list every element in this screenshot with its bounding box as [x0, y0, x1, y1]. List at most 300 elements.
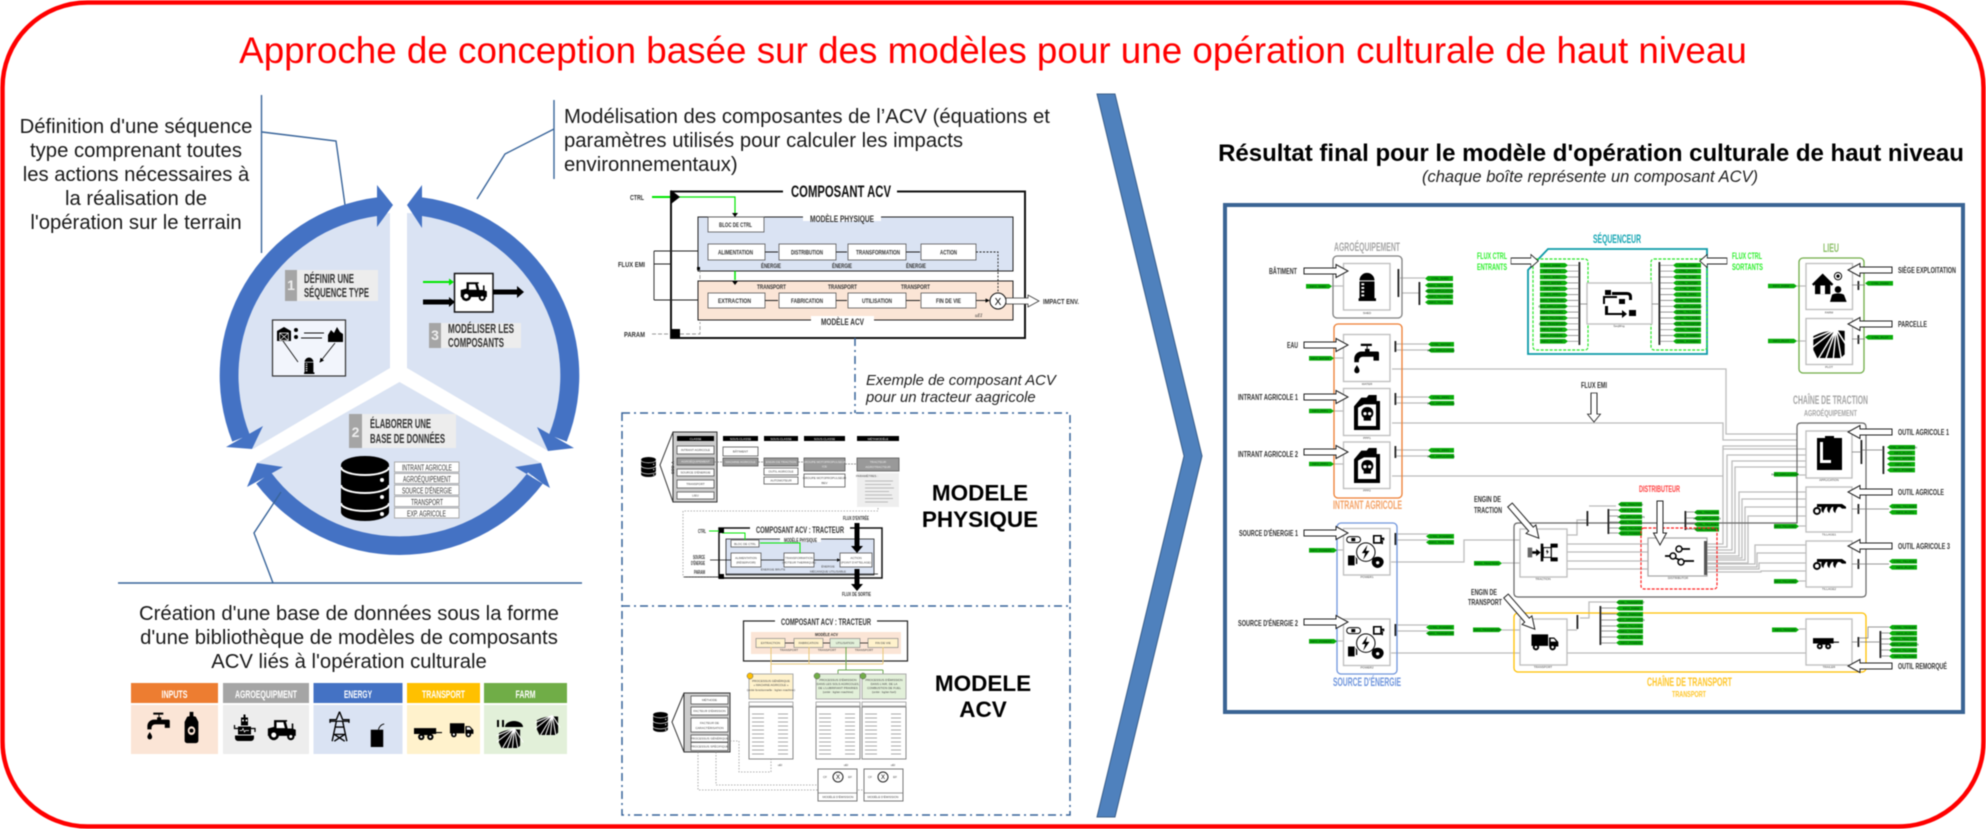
- tags: traction chain: INFO_TILLAGE2: [1620, 526, 1642, 530]
- group: sequencer: [1477, 233, 1763, 354]
- diagram: tractor physical model: COMPOSANT ACV : TRACTEUR: [756, 525, 844, 535]
- emission models: EF: [848, 775, 852, 779]
- subtitle: final result: (chaque boîte représente un composant ACV): [1422, 168, 1758, 186]
- process columns: DANS LES SOLS AGRICOLES,: [817, 682, 860, 686]
- diagram: physical model class tree: OUTIL AGRICOLE: [769, 470, 793, 474]
- database categories: EXP. AGRICOLE: [407, 508, 446, 518]
- group: agricultural input: CTRL_PPP1: [1433, 395, 1450, 399]
- step 3 label: MODÉLISER LES: [448, 321, 514, 336]
- tags: traction chain: INFO_PLOT1: [1622, 508, 1640, 512]
- group: agroequipment: [1269, 239, 1454, 318]
- group: energy source: CTRL_POWER2: [1430, 625, 1452, 629]
- physical model block: MODÈLE PHYSIQUE: [810, 214, 874, 224]
- chevron arrow: [1097, 94, 1202, 817]
- diagram: LCA model for tractor: FIN DE VIE: [875, 641, 891, 645]
- tags: traction chain: CTRL_TILLAGE1: [1894, 504, 1917, 508]
- group: agricultural input: WATER: [1362, 382, 1373, 386]
- diagram: physical model class tree: SOUS-CLASSE: [770, 437, 792, 441]
- diagram: LCA component: [618, 182, 1079, 339]
- group: sequencer: INFO_TRACTION: [1540, 298, 1564, 302]
- tags: traction chain: CTRL_TILLAGE2: [1894, 559, 1917, 563]
- database categories: AGROÉQUIPEMENT: [403, 474, 451, 484]
- LCA database and classes: PROCESSUS GÉNÉRIQUE: [691, 736, 728, 740]
- machine components: TILLAGE2: [1822, 587, 1836, 591]
- category: agroequipment: [223, 683, 309, 754]
- database categories: [394, 462, 459, 518]
- arrow: left arc: [220, 185, 393, 449]
- physical model block: TRANSFORMATION: [856, 250, 900, 256]
- diagram: tractor physical model: ACTION: [850, 556, 862, 560]
- category: transport: TRANSPORT: [422, 689, 465, 701]
- text: database creation: d'une bibliothèque de modèles de composants: [140, 627, 558, 649]
- distributor: [1639, 484, 1717, 589]
- diagram: LCA component: PARAM: [624, 332, 645, 339]
- machine components: TILLAGE1: [1822, 532, 1836, 536]
- diagram: physical model class tree: SOUS-CLASSE: [730, 437, 751, 441]
- diagram: physical model class tree: ICE: [822, 464, 827, 468]
- group: transport chain: TRAILER: [1823, 665, 1836, 669]
- flux emi label: [1581, 380, 1607, 422]
- LCA model block: FABRICATION: [791, 299, 823, 305]
- group: sequencer: CTRL_TRACTION: [1676, 298, 1700, 302]
- tags: traction chain: [1474, 440, 1917, 584]
- diagram: physical model class tree: [641, 432, 899, 577]
- physical model block: DISTRIBUTION: [791, 250, 823, 256]
- group: sequencer: CTRL_PPP2: [1680, 293, 1697, 297]
- heading: modele acv: MODELE: [935, 671, 1031, 696]
- category: farm: [484, 683, 567, 754]
- grey signal lines: [1332, 278, 1806, 653]
- step 1 label: [285, 270, 378, 301]
- group: transport chain: INFO_TILLAGE1: [1620, 624, 1642, 628]
- group: sequencer: CTRL_TRAILER: [1677, 328, 1699, 332]
- diagram: physical model class tree: BDD-A: [670, 461, 675, 474]
- group: transport chain: TRANSPORT: [1468, 597, 1503, 607]
- group: agricultural input: [1238, 324, 1455, 512]
- group: energy source: CTRL_POWER1: [1430, 534, 1452, 538]
- diagram: LCA component: IMPACT ENV.: [1043, 299, 1079, 306]
- category: farm: FARM: [516, 689, 536, 701]
- group: transport chain: INFO_PLOT1: [1896, 631, 1914, 635]
- group: transport chain: INFO_PARKING: [1620, 612, 1642, 616]
- heading: modele physique: PHYSIQUE: [922, 507, 1038, 532]
- diagram: LCA component: FLUX EMI: [618, 262, 645, 269]
- LCA database and classes: FACTEUR DE: [700, 721, 719, 725]
- group: agricultural input: PPP2: [1363, 488, 1371, 492]
- group: sequencer: INFO_PPP2: [1544, 293, 1560, 297]
- category: agroequipment: AGROEQUIPMENT: [235, 689, 297, 701]
- LCA model block: TRANSPORT: [901, 285, 930, 291]
- group: sequencer: CTRL_SHED: [1679, 275, 1697, 279]
- tags: traction chain: CTRL_TILLAGE2: [1696, 527, 1719, 531]
- tags: traction chain: INFO_WATER: [1894, 457, 1912, 461]
- diagram: LCA model for tractor: TRANSPORT: [855, 648, 873, 652]
- callout: sequence definition: [20, 95, 345, 253]
- group: sequencer: CTRL_TILLAGE2: [1677, 316, 1700, 320]
- LCA model block: uEI: [975, 314, 983, 319]
- group: agroequipment: AGROÉQUIPEMENT: [1334, 239, 1400, 254]
- flux emi label: FLUX EMI: [1581, 380, 1607, 390]
- group: sequencer: INFO_TRAILER: [1542, 328, 1562, 332]
- diagram: tractor physical model: SOURCE: [693, 555, 705, 561]
- LCA database and classes: [653, 693, 880, 790]
- LCA model block: EXTRACTION: [718, 299, 751, 305]
- diagram: physical model class tree: INTRANT AGRICOLE: [681, 448, 710, 452]
- group: sequencer: CTRL_PPP1: [1680, 287, 1697, 291]
- group: agroequipment: INFO_TRACTION: [1428, 283, 1452, 287]
- callout: LCA component modelling: [477, 100, 1050, 199]
- group: location: CTRL_FARM: [1871, 281, 1889, 285]
- group: sequencer: INFO_PLOT1: [1543, 269, 1561, 273]
- group: energy source: INFO_POWER2: [1310, 640, 1332, 644]
- database categories: INTRANT AGRICOLE: [402, 462, 452, 472]
- arrow: bottom arc: [247, 463, 550, 555]
- category: transport: [407, 683, 480, 754]
- group: transport chain: INFO_FARM: [1623, 606, 1640, 610]
- labels: tools: ENGIN DE: [1474, 494, 1501, 504]
- group: location: FARM: [1825, 310, 1834, 314]
- diagram: physical model class tree: BEV: [821, 481, 828, 485]
- group: agroequipment: INFO_APPLICATION: [1426, 289, 1454, 293]
- diagram: tractor physical model: ALIMENTATION: [735, 556, 757, 560]
- group: energy source: SOURCE D'ÉNERGIE 1: [1239, 528, 1298, 538]
- tags: traction chain: INFO_TILLAGE1: [1620, 520, 1642, 524]
- LCA model block: [698, 281, 1013, 327]
- tags: traction chain: INFO_POWER: [1893, 468, 1913, 472]
- text: sequence definition: l'opération sur le terrain: [30, 212, 242, 234]
- group: agricultural input: INFO_PPP2: [1312, 462, 1328, 466]
- group: transport chain: OUTIL REMORQUÉ: [1898, 661, 1947, 671]
- emission models: X: [881, 775, 885, 781]
- group: location: INFO_FARM: [1773, 284, 1790, 288]
- text: sequence definition: les actions nécessaires à: [23, 164, 250, 186]
- group: transport chain: INFO_TRAILER: [1621, 635, 1641, 639]
- diagram: tractor physical model: TRANSFORMATION: [785, 556, 813, 560]
- database categories: TRANSPORT: [411, 497, 443, 507]
- group: traction chain: [1474, 380, 1950, 597]
- group: agroequipment: CTRL_SHED: [1431, 276, 1449, 280]
- group: transport chain: CTRL_TRAILER: [1894, 625, 1916, 629]
- text: sequence definition: Définition d'une séquence: [20, 116, 252, 138]
- tags: traction chain: INFO_PLOT1: [1896, 510, 1914, 514]
- emission models: MODÈLE D'ÉMISSION: [868, 794, 898, 799]
- tags: traction chain: INFO_PLOT1: [1894, 451, 1912, 455]
- category: energy: ENERGY: [344, 689, 372, 701]
- diagram: tractor physical model: FLUX D'ENTRÉE: [843, 514, 869, 522]
- physical model block: ÉNERGIE: [832, 262, 852, 270]
- diagram: physical model class tree: ENGIN DE TRACTION: [766, 460, 796, 464]
- group: transport chain: INFO_TRANSPORT: [1474, 628, 1500, 632]
- group: sequencer: CTRL_POWER1: [1677, 334, 1699, 338]
- cycle diagram: [220, 185, 579, 555]
- labels: tools: TRACTION: [1474, 505, 1502, 515]
- icon: database: [341, 456, 389, 521]
- diagram: physical model class tree: MACHINE AGRICOLE: [725, 460, 756, 464]
- group: agroequipment: SHED: [1363, 311, 1372, 315]
- LCA model block: TRANSPORT: [757, 285, 786, 291]
- group: sequencer: SeqMng: [1613, 324, 1625, 328]
- group: sequencer: FLUX CTRL: [1477, 251, 1507, 261]
- tags: traction chain: INFO_PLOT2: [1896, 565, 1914, 569]
- group: transport chain: TRANSPORT: [1672, 689, 1707, 699]
- database categories: SOURCE D'ÉNERGIE: [402, 486, 452, 496]
- group: agricultural input: INFO_APPLICATION: [1427, 401, 1455, 405]
- group: energy source: INFO_TRANSPORT: [1428, 631, 1454, 635]
- group: agricultural input: EAU: [1287, 340, 1298, 350]
- diagram: physical model class tree: CLASSE: [690, 437, 701, 441]
- group: sequencer: INFO_POWER1: [1541, 334, 1563, 338]
- diagram: tractor physical model: MODÈLE PHYSIQUE: [784, 536, 817, 544]
- step 1 label: 1: [287, 277, 295, 293]
- diagram: physical model class tree: SOURCE D'ÉNERGIE: [681, 470, 710, 474]
- group: sequencer: INFO_POWER2: [1541, 339, 1563, 343]
- diagram: LCA model for tractor: MODÈLE ACV: [815, 630, 838, 637]
- group: transport chain: ENGIN DE: [1471, 587, 1497, 597]
- step 1 label: SÉQUENCE TYPE: [304, 285, 369, 300]
- tags: traction chain: CTRL_TRACTION: [1619, 502, 1643, 506]
- diagram: physical model class tree: GROUPE MOTOPROPULSEUR: [803, 476, 847, 480]
- tags: traction chain: CTRL_APPLICATION: [1889, 445, 1917, 449]
- physical model block: ÉNERGIE: [906, 262, 926, 270]
- group: energy source: SOURCE D'ÉNERGIE: [1333, 676, 1401, 689]
- machine components: TRACTION: [1535, 577, 1551, 581]
- process columns: « MACHINE AGRICOLE »: [753, 683, 789, 687]
- group: energy source: POWER1: [1360, 575, 1374, 579]
- LCA model block: MODÈLE ACV: [821, 317, 864, 327]
- group: location: CTRL_PLOT: [1872, 335, 1889, 339]
- LCA database and classes: FACTEUR D'ÉMISSION: [693, 708, 726, 713]
- labels: tools: OUTIL AGRICOLE 1: [1898, 427, 1949, 437]
- tags: traction chain: INFO_POWER1: [1620, 531, 1642, 535]
- text: database creation: ACV liés à l'opération culturale: [211, 651, 487, 673]
- arrow: right arc: [407, 185, 579, 451]
- emission models: MODÈLE D'ÉMISSION: [823, 794, 853, 799]
- process columns: (unité fonctionnelle : kg/an machine): [747, 688, 795, 692]
- diagram: physical model class tree: AGROTRACTEUR: [865, 465, 891, 469]
- diagram: physical model class tree: TRACTEUR: [870, 460, 887, 464]
- process columns: PROCESSUS D'ÉMISSION: [865, 677, 903, 682]
- group: agroequipment: INFO_TILLAGE1: [1429, 295, 1451, 299]
- legend: library categories: [131, 683, 567, 754]
- tags: traction chain: INFO_TILLAGE1: [1774, 524, 1796, 528]
- group: sequencer: CTRL_FARM: [1679, 263, 1697, 267]
- text: LCA component modelling: Modélisation des composantes de l’ACV (équations et: [564, 106, 1050, 128]
- process columns: COMBUSTION DE FUEL: [867, 686, 901, 690]
- step 2 label: [349, 414, 456, 448]
- labels: tools: OUTIL AGRICOLE 3: [1898, 541, 1950, 551]
- group: agroequipment: INFO_SHED: [1310, 284, 1326, 288]
- diagram: LCA model for tractor: TRANSPORT: [780, 648, 798, 652]
- diagram: LCA model for tractor: EXTRACTION: [761, 641, 780, 645]
- group: sequencer: INFO_PPP1: [1544, 287, 1560, 291]
- diagram: LCA model for tractor: UTILISATION: [836, 641, 854, 645]
- diagram: LCA component: COMPOSANT ACV: [791, 182, 891, 201]
- tags: traction chain: INFO_TRACTION: [1475, 561, 1499, 565]
- heading: final result: Résultat final pour le modèle d'opération culturale de haut niveau: [1218, 140, 1964, 167]
- step 2 label: BASE DE DONNÉES: [370, 431, 445, 446]
- diagram: tractor physical model: MÉCANIQUE UTILISABLE: [810, 568, 846, 574]
- physical model block: BLOC DE CTRL: [719, 223, 752, 229]
- group: sequencer: INFO_WATER: [1543, 281, 1561, 285]
- text: example caption: Exemple de composant ACV: [866, 373, 1058, 389]
- heading: modele acv: ACV: [959, 697, 1007, 722]
- group: energy source: INFO_TRACTION: [1429, 540, 1453, 544]
- diagram: physical model class tree: AUTOMOTEUR: [770, 478, 792, 482]
- process columns: (unité : kg/an machine): [823, 690, 853, 694]
- group: transport chain: TRANSPORT: [1534, 665, 1552, 669]
- diagram: tractor physical model: (RÉSERVOIR): [736, 560, 756, 564]
- group: location: PLOT: [1825, 365, 1833, 369]
- diagram: physical model class tree: PARAMÈTRES :: [856, 473, 878, 478]
- labels: tools: OUTIL AGRICOLE: [1898, 487, 1944, 497]
- group: sequencer: CTRL_APPLICATION: [1674, 304, 1702, 308]
- category: energy: [314, 683, 402, 754]
- tags: traction chain: INFO_PPP1: [1895, 462, 1911, 466]
- distributor: DISTRIBUTEUR: [1639, 484, 1680, 494]
- group: sequencer: CTRL_WATER: [1678, 281, 1698, 285]
- process columns: (unité : kg/an fuel): [872, 690, 896, 694]
- group: location: PARCELLE: [1898, 319, 1927, 329]
- group: sequencer: INFO_TILLAGE1: [1541, 310, 1563, 314]
- step 1 label: DÉFINIR UNE: [304, 271, 354, 286]
- diagram: LCA component: CTRL: [630, 195, 645, 202]
- tags: traction chain: CTRL_TRACTION: [1695, 510, 1719, 514]
- diagram: LCA model for tractor: TRANSPORT: [818, 648, 836, 652]
- group: transport chain: [1468, 587, 1947, 699]
- step 2 label: ÉLABORER UNE: [370, 416, 431, 431]
- tags: traction chain: CTRL_TILLAGE1: [1696, 522, 1719, 526]
- diagram: tractor physical model: D'ÉNERGIE: [691, 559, 705, 567]
- diagram: physical model class tree: MÉTAMODÈLE: [868, 436, 888, 441]
- group: agroequipment: BÂTIMENT: [1269, 265, 1298, 276]
- LCA model block: TRANSPORT: [828, 285, 857, 291]
- group: location: SIÈGE EXPLOITATION: [1898, 265, 1956, 275]
- diagram: physical model class tree: BÂTIMENT: [733, 448, 748, 454]
- LCA database and classes: CARACTÉRISATION: [695, 725, 724, 730]
- group: sequencer: SÉQUENCEUR: [1593, 233, 1641, 246]
- text: example caption: pour un tracteur aagricole: [865, 390, 1036, 406]
- sector 3: [407, 213, 566, 451]
- text: LCA component modelling: environnementaux): [564, 154, 738, 176]
- diagram: tractor physical model: [684, 514, 882, 598]
- distributor: DISTRIBUTOR: [1668, 576, 1689, 580]
- group: energy source: [1238, 523, 1454, 689]
- group: sequencer: CTRL_PLOT1: [1679, 269, 1698, 273]
- group: sequencer: INFO_TILLAGE2: [1541, 316, 1563, 320]
- group: agricultural input: INFO_WATER: [1311, 356, 1329, 360]
- tags: traction chain: INFO_APPLICATION: [1693, 516, 1721, 520]
- diagram: tractor physical model: (MOTEUR THERMIQUE): [782, 560, 816, 564]
- diagram: tractor physical model: ÉNERGIE BRUTE: [761, 566, 785, 572]
- group: agricultural input: INTRANT AGRICOLE 1: [1238, 392, 1298, 402]
- physical model block: [698, 213, 1013, 271]
- group: agricultural input: INTRANT AGRICOLE 2: [1238, 449, 1298, 459]
- group: sequencer: CTRL_POWER2: [1677, 339, 1699, 343]
- callout: database creation: [118, 492, 582, 673]
- step 3 label: 3: [431, 327, 439, 343]
- labels: tools: [1474, 426, 1950, 552]
- diagram: physical model class tree: LIEU: [692, 494, 699, 498]
- group: sequencer: INFO_FARM: [1544, 263, 1561, 267]
- diagram: tractor physical model: ÉNERGIE: [821, 564, 835, 568]
- diagram: tractor physical model: BLOC DE CTRL: [734, 542, 756, 546]
- example connector line: [854, 338, 856, 413]
- group: transport chain: INFO_TILLAGE2: [1894, 654, 1916, 658]
- tags: traction chain: INFO_TILLAGE2: [1774, 579, 1796, 583]
- group: agricultural input: INFO_APPLICATION: [1427, 454, 1455, 458]
- group: agricultural input: CTRL_PPP2: [1433, 448, 1450, 452]
- tags: traction chain: INFO_APPLICATION: [1771, 472, 1799, 476]
- icon: tractor component: [423, 274, 524, 312]
- emission models: uEI: [891, 763, 895, 767]
- group: agricultural input: CTRL_WATER: [1431, 342, 1451, 346]
- group: transport chain: INFO_APPLICATION: [1617, 618, 1645, 622]
- process columns: DANS L'AIR, DE LA: [871, 682, 897, 686]
- emission models: [778, 763, 903, 801]
- group: transport chain: INFO_TRAILER: [1775, 628, 1795, 632]
- LCA model block: FIN DE VIE: [936, 299, 961, 305]
- group: energy source: POWER2: [1360, 666, 1374, 670]
- tags: traction chain: INFO_APPLICATION: [1617, 515, 1645, 519]
- group: transport chain: INFO_TILLAGE1: [1894, 648, 1916, 652]
- group: agricultural input: INFO_APPLICATION: [1427, 348, 1455, 352]
- step 3 label: COMPOSANTS: [448, 336, 504, 350]
- diagram: LCA model for tractor: FABRICATION: [799, 641, 818, 645]
- category: inputs: [131, 683, 218, 754]
- diagram: tractor physical model: PARAM: [694, 570, 705, 576]
- group: sequencer: INFO_APPLICATION: [1538, 304, 1566, 308]
- group: location: [1768, 243, 1956, 373]
- step 3 label: [429, 321, 521, 350]
- group: sequencer: INFO_SHED: [1544, 275, 1560, 279]
- group: sequencer: FLUX CTRL: [1732, 251, 1762, 261]
- emission models: CF: [823, 775, 827, 779]
- physical model block: ACTION: [940, 250, 957, 256]
- emission models: uEI: [844, 763, 848, 767]
- diagram: LCA model for tractor: [653, 617, 908, 801]
- group: location: LIEU: [1823, 243, 1839, 255]
- group: sequencer: ENTRANTS: [1477, 262, 1507, 272]
- heading: modele physique: MODELE: [932, 480, 1028, 506]
- diagram: physical model class tree: AGROÉQUIPEMENT: [681, 458, 710, 464]
- group: transport chain: CTRL_TRANSPORT: [1618, 600, 1645, 604]
- group: sequencer: CTRL_TILLAGE1: [1677, 310, 1700, 314]
- emission models: X: [836, 775, 840, 781]
- text: sequence definition: type comprenant toutes: [30, 140, 242, 162]
- group: energy source: INFO_POWER1: [1310, 548, 1332, 552]
- physical model block: ÉNERGIE: [761, 262, 781, 270]
- panel: dash-dot example box: [622, 413, 1070, 815]
- panel: final model frame: [1225, 205, 1963, 712]
- LCA database and classes: PROCESSUS SPÉCIFIQUE: [691, 744, 728, 748]
- group: transport chain: INFO_POWER2: [1620, 641, 1642, 645]
- machine components: [1520, 431, 1852, 591]
- sector 1: [236, 213, 390, 449]
- diagram: physical model class tree: TRANSPORT: [686, 482, 705, 486]
- sector 2: [257, 382, 541, 543]
- group: transport chain: CHAÎNE DE TRANSPORT: [1647, 676, 1732, 689]
- diagram: LCA model for tractor: COMPOSANT ACV : TRACTEUR: [781, 617, 871, 627]
- LCA database and classes: MÉTHODE: [702, 697, 717, 702]
- group: sequencer: CTRL_TRANSPORT: [1675, 322, 1702, 326]
- group: sequencer: INFO_TRANSPORT: [1539, 322, 1565, 326]
- text: LCA component modelling: paramètres utilisés pour calculer les impacts: [564, 130, 963, 152]
- group: agricultural input: INTRANT AGRICOLE: [1333, 500, 1402, 512]
- emission models: EF: [893, 775, 897, 779]
- group: location: INFO_PLOT: [1773, 339, 1789, 343]
- group: sequencer: SORTANTS: [1732, 262, 1763, 272]
- text: database creation: Création d'une base de données sous la forme: [139, 603, 559, 625]
